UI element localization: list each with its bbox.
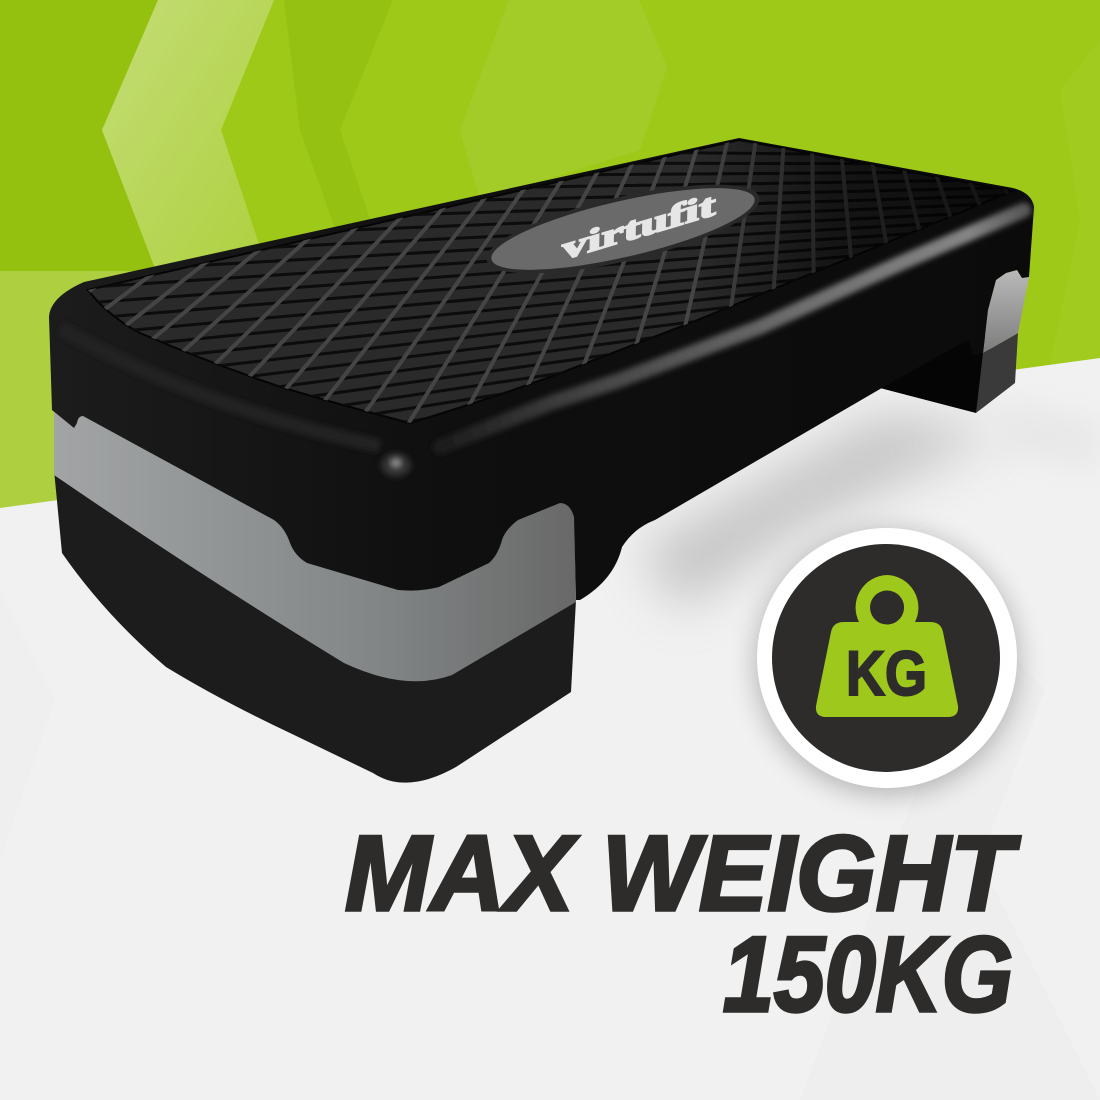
icon: kg weight: KG — [846, 639, 927, 709]
long edge highlight — [440, 210, 1024, 447]
far leg — [880, 270, 1029, 413]
green background — [0, 0, 1100, 520]
logo badge — [479, 166, 767, 292]
grey riser band — [54, 405, 576, 681]
top traction mat — [86, 140, 1012, 424]
mat row grooves — [98, 151, 1000, 421]
corner highlight — [381, 453, 411, 477]
white floor — [0, 358, 1100, 619]
upper body — [49, 138, 1034, 600]
icon: kg weight — [816, 575, 958, 717]
headline line 2: 150KG — [723, 914, 1013, 1034]
front lip sheen — [60, 328, 380, 446]
headline line 1: MAX WEIGHT — [345, 813, 1020, 933]
step platform — [49, 138, 1036, 783]
mat cross ridges — [88, 142, 1009, 423]
lower riser — [54, 470, 576, 783]
headline — [345, 813, 1020, 1034]
logo badge: virtufit — [562, 186, 717, 267]
weight badge — [757, 528, 1017, 793]
